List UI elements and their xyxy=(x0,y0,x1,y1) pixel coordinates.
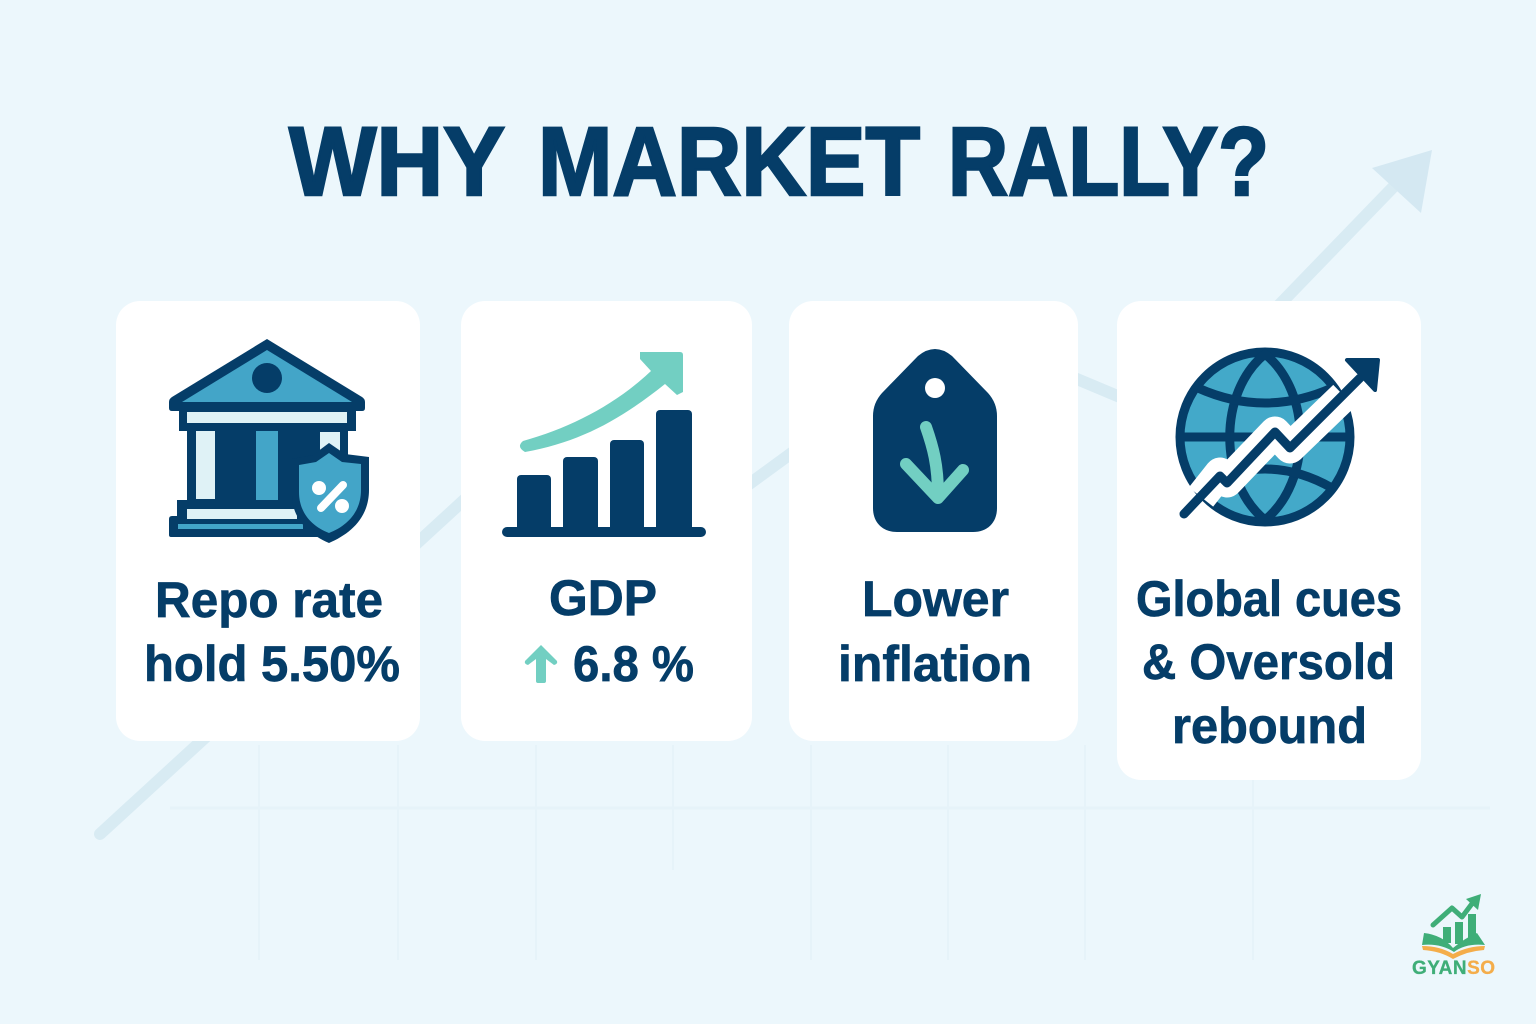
panel: repo rate xyxy=(116,301,420,741)
label: repo rate: hold 5.50% xyxy=(144,636,400,692)
label: global cues: rebound xyxy=(1172,698,1367,754)
panel: lower inflation xyxy=(789,301,1078,741)
background trend arrow xyxy=(100,150,1432,834)
title xyxy=(289,107,1269,216)
icon: small up arrow xyxy=(525,645,557,683)
label: lower inflation: inflation xyxy=(838,636,1032,692)
icon: bank with percent shield xyxy=(169,339,369,543)
title: WHY xyxy=(289,107,505,216)
label: GDP: GDP xyxy=(549,570,657,626)
title: MARKET xyxy=(538,107,920,216)
icon: price tag with down arrow xyxy=(873,349,997,532)
label: global cues xyxy=(1136,571,1402,754)
logo: Gyanso xyxy=(1412,894,1495,979)
label: global cues: Global cues xyxy=(1136,571,1402,627)
label: repo rate: Repo rate xyxy=(155,572,383,628)
label: global cues: & Oversold xyxy=(1142,634,1395,690)
label: lower inflation: Lower xyxy=(862,571,1009,627)
label: GDP value: 6.8 % xyxy=(573,636,694,692)
label: repo rate xyxy=(144,572,400,692)
logo: Gyanso: GYANSO xyxy=(1412,958,1495,979)
icon: rising bar chart xyxy=(502,352,706,537)
panel: global cues xyxy=(1117,301,1421,780)
title: RALLY? xyxy=(948,107,1269,216)
label: lower inflation xyxy=(838,571,1032,692)
panel: GDP xyxy=(461,301,752,741)
icon: globe with rising arrow xyxy=(1180,352,1378,522)
